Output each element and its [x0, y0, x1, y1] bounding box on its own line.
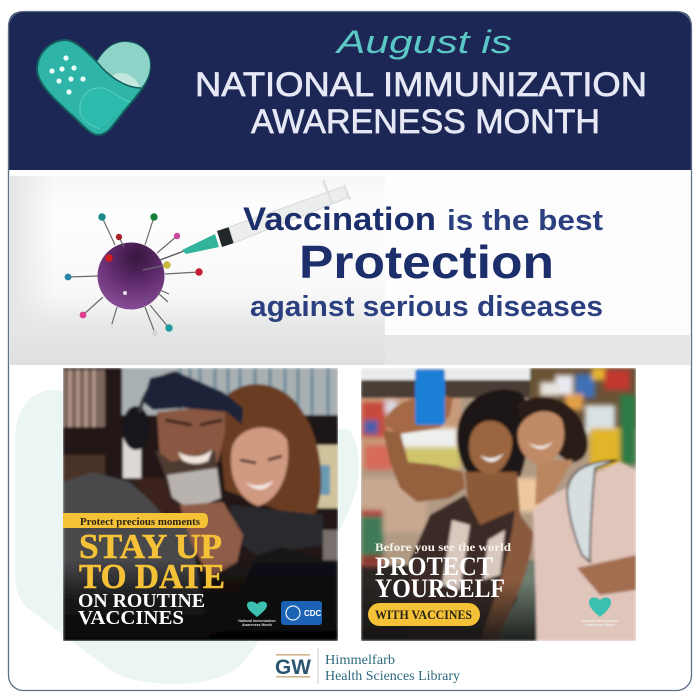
- icon: awareness month logo: Awareness Month: [242, 623, 272, 627]
- illustration: syringe: [160, 180, 350, 260]
- man's stubble: [155, 450, 218, 480]
- headline: stay up to date: STAY UP: [79, 527, 222, 566]
- foreground shoulder: [217, 547, 338, 641]
- headline: protect yourself: PROTECT: [375, 552, 493, 581]
- icon: awareness month logo: [581, 598, 619, 627]
- headline: stay up to date: TO DATE: [79, 557, 225, 596]
- headphones: [122, 406, 150, 450]
- button: with vaccines: [368, 603, 480, 626]
- logo: GW: GW: [275, 656, 311, 679]
- man's chest: [132, 478, 182, 513]
- man's face: [156, 406, 226, 464]
- photo: couple taking selfie: [361, 368, 636, 641]
- banner: protect precious moments: Protect precious moments: [80, 517, 200, 528]
- man's face: [518, 411, 564, 465]
- panel: vaccination message: [10, 172, 690, 365]
- subheading: on routine vaccines: ON ROUTINE: [78, 590, 205, 612]
- photo card: protect yourself: [361, 368, 636, 641]
- text: Vaccination is the best: is the best: [447, 205, 603, 237]
- text: Vaccination is the best: [243, 201, 603, 237]
- hand: [180, 502, 243, 578]
- icon: bandaged heart: [37, 40, 150, 135]
- man's hand: [577, 555, 636, 595]
- girl's top: [230, 505, 323, 555]
- cap: [143, 372, 243, 425]
- subheading: on routine vaccines: [78, 594, 204, 624]
- banner: protect precious moments: [63, 513, 208, 528]
- backpack strap: [567, 460, 617, 562]
- man's smile: [178, 450, 212, 464]
- text: library name: [325, 652, 460, 683]
- icon: awareness month logo: National Immunization: [581, 619, 619, 623]
- phone: [415, 369, 445, 425]
- footer: library logo: [275, 648, 460, 684]
- photo card: stay up to date: [63, 368, 338, 641]
- woman's face: [469, 421, 512, 475]
- man's hair: [517, 397, 588, 463]
- text: before you see the world: Before you see the world: [375, 542, 512, 554]
- heading: August is: August is: [334, 24, 512, 60]
- headline: protect yourself: YOURSELF: [375, 574, 505, 603]
- man's neck: [535, 460, 573, 505]
- button: with vaccines: WITH VACCINES: [375, 608, 472, 622]
- headline: stay up to date: [79, 534, 224, 588]
- text: Vaccination is the best: Vaccination: [243, 201, 436, 237]
- woman's hair: [457, 390, 529, 477]
- woman's arm: [383, 430, 465, 502]
- heading: National Immunization: NATIONAL IMMUNIZATION: [195, 66, 647, 104]
- man's sweater: [63, 472, 210, 641]
- heading: Awareness Month: AWARENESS MONTH: [251, 103, 600, 141]
- logo: CDC: [281, 601, 322, 625]
- girl's face: [231, 428, 288, 506]
- header panel: [8, 11, 692, 170]
- text: library name: Health Sciences Library: [325, 668, 460, 683]
- subheading: on routine vaccines: VACCINES: [78, 607, 184, 629]
- text: against serious diseases: against serious diseases: [250, 291, 603, 323]
- woman's other arm: [480, 508, 533, 641]
- man's shirt: [533, 462, 636, 641]
- text: library name: Himmelfarb: [325, 652, 395, 667]
- logo: CDC: CDC: [304, 609, 322, 618]
- headline: protect yourself: [375, 558, 504, 598]
- man's beard: [167, 468, 221, 510]
- icon: awareness month logo: Awareness Month: [585, 623, 615, 627]
- woman's neck and chest: [465, 472, 525, 530]
- icon: awareness month logo: [238, 601, 276, 627]
- icon: awareness month logo: National Immunization: [238, 619, 276, 623]
- illustration: virus with pins: [65, 213, 203, 336]
- background watermark heart: [15, 390, 359, 684]
- woman's dress: [405, 495, 517, 641]
- text: Protection: Protection: [299, 236, 554, 288]
- photo: man and girl: [63, 368, 338, 641]
- girl hair: [217, 384, 321, 522]
